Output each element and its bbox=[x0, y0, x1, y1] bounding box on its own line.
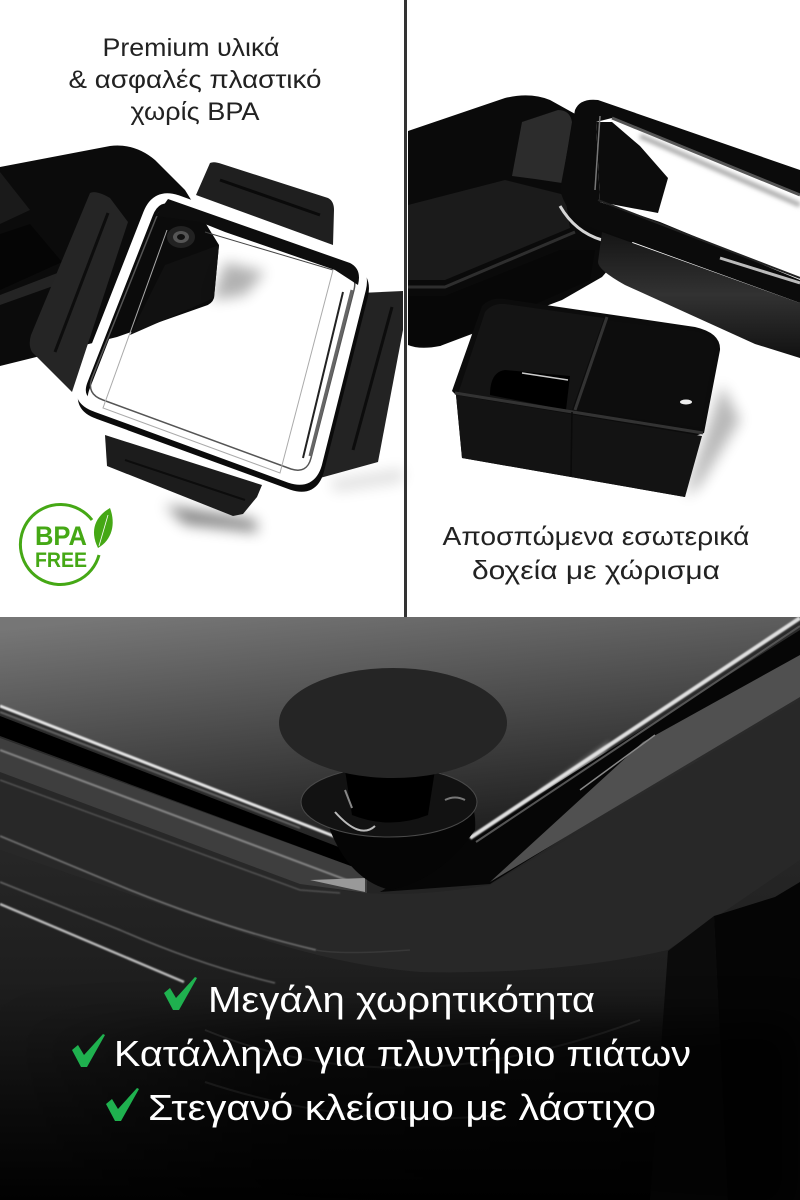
panel: right removable trays bbox=[408, 95, 800, 585]
panel: bottom closeup photo bbox=[0, 617, 800, 1200]
icon: BPA free badge: BPA bbox=[35, 521, 87, 551]
photo: shadow under lid bbox=[670, 165, 800, 210]
photo: small divided tray bbox=[452, 299, 720, 497]
text: removable inner trays bbox=[442, 521, 750, 585]
photo: lower steps bbox=[205, 882, 800, 1200]
feature: large capacity: Μεγάλη χωρητικότητα bbox=[208, 979, 595, 1020]
feature: dishwasher safe: Κατάλληλο για πλυντήριο πιάτων bbox=[114, 1033, 691, 1074]
heading: premium materials bbox=[68, 34, 322, 126]
text: removable inner trays: Αποσπώμενα εσωτερικά bbox=[442, 521, 750, 551]
photo: big box bbox=[408, 95, 667, 348]
photo: dark vignette behind text bbox=[0, 1020, 800, 1200]
photo: stem centre dark bbox=[329, 760, 475, 890]
panel: left BPA-free lid bbox=[0, 34, 403, 585]
icon: BPA free badge bbox=[20, 505, 113, 585]
photo: small tray shadow bbox=[685, 385, 740, 497]
photo: lid top surface bbox=[0, 617, 800, 860]
heading: premium materials: Premium υλικά bbox=[102, 34, 280, 62]
heading: premium materials: χωρίς BPA bbox=[130, 98, 260, 126]
photo: glossy reflection bbox=[540, 740, 610, 800]
shadow under lid bbox=[165, 262, 403, 532]
photo: lid lower tab bbox=[598, 232, 800, 358]
photo: glass lid ring bbox=[81, 198, 364, 487]
photo: right glass edge bbox=[380, 618, 800, 892]
photo: box behind the lid bbox=[0, 146, 219, 366]
photo: big box tab bbox=[512, 110, 572, 183]
photo: valve stem base glass bbox=[301, 767, 477, 837]
feature: watertight seal: Στεγανό κλείσιμο με λάστιχο bbox=[148, 1087, 656, 1128]
panel: background white bbox=[0, 0, 800, 617]
photo: valve knob bbox=[279, 668, 507, 778]
photo: left glass edge bbox=[0, 706, 367, 893]
heading: premium materials: & ασφαλές πλαστικό bbox=[68, 66, 322, 94]
photo: lid tabs bbox=[30, 162, 403, 516]
list: features with check marks bbox=[72, 977, 691, 1128]
icon: BPA free badge: FREE bbox=[35, 549, 87, 572]
photo: body bbox=[0, 617, 800, 1200]
icon: lid valve knob bbox=[167, 226, 195, 248]
photo: lid lip curve bbox=[0, 700, 800, 983]
text: removable inner trays: δοχεία με χώρισμα bbox=[472, 555, 720, 585]
divider bbox=[404, 0, 407, 617]
photo: lid bbox=[560, 100, 800, 303]
